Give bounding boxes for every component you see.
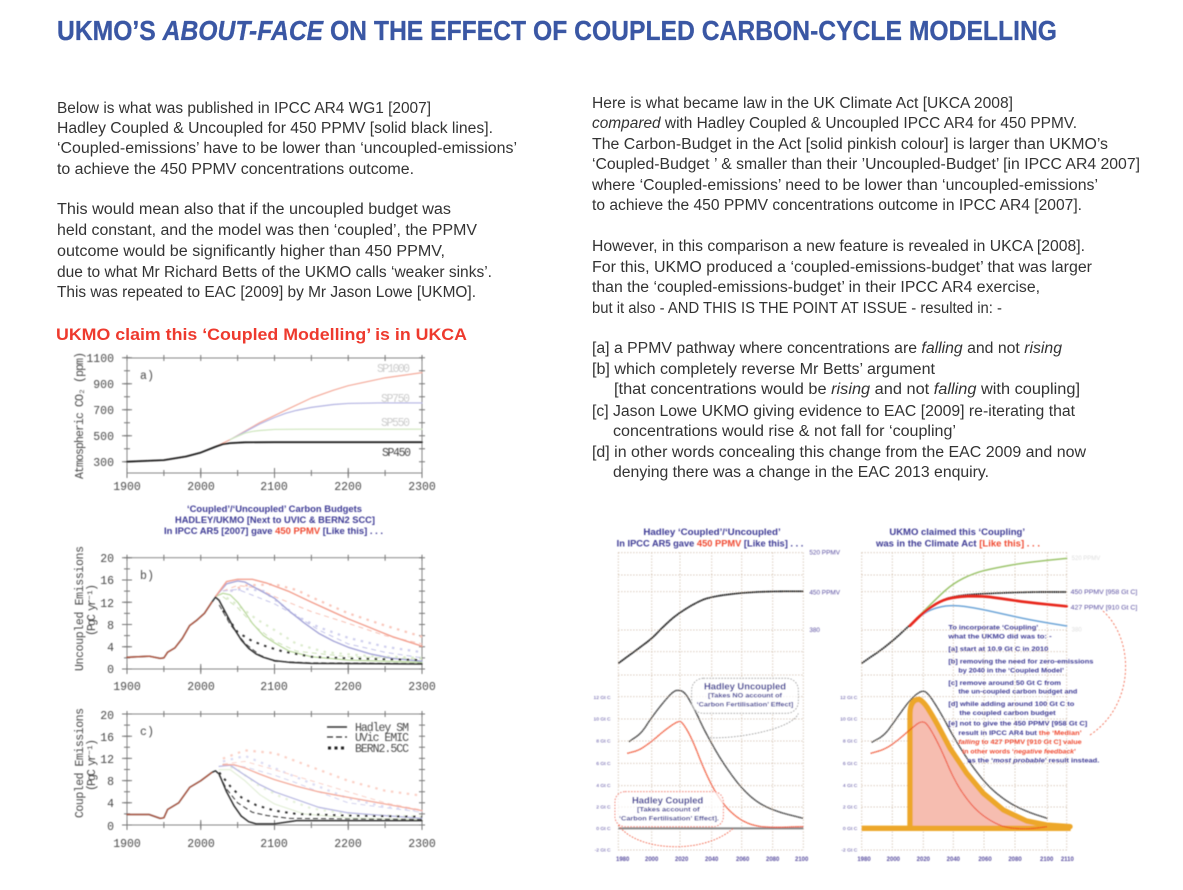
x tick labels e: [857, 857, 1074, 863]
concentration reference curve e: [862, 592, 1067, 663]
scenario label SP750: SP750: [381, 393, 410, 406]
text block: left intro: ‘Coupled-emissions’ have to be lower than ‘uncoupled-emissions’: [57, 140, 517, 157]
x tick labels e: 2040: [947, 857, 961, 863]
coupled emissions curve d: [627, 721, 803, 827]
x tick labels e: 2000: [887, 857, 901, 863]
annotation: how UKMO incorporated coupling: what the UKMO did was to: -: [947, 633, 1052, 640]
annotation: how UKMO incorporated coupling: result in IPCC AR4 but the ‘Median’: [958, 730, 1082, 737]
text block: right lettered list: [a] a PPMV pathway where concentrations are falling and not rising: [592, 340, 1062, 357]
blue lower scenario curve: [910, 606, 1067, 626]
PPMV labels d: [809, 550, 841, 634]
x tick labels b: 2000: [187, 681, 215, 694]
y tick labels d: 0 Gt C: [596, 826, 611, 832]
text block: left weaker sinks argument: outcome would be significantly higher than 450 PPMV,: [57, 243, 445, 260]
y tick labels d: 8 Gt C: [596, 739, 611, 745]
annotation: how UKMO incorporated coupling: the un-coupled carbon budget and: [958, 689, 1077, 696]
concentration curve d: [618, 591, 803, 663]
x tick labels a: 2300: [408, 481, 436, 494]
y tick labels a: 300: [93, 457, 114, 470]
y tick labels d: 2 Gt C: [596, 805, 611, 811]
x tick labels e: 2060: [978, 857, 992, 863]
caption: carbon budgets between charts: ‘Coupled’/‘Uncoupled’ Carbon Budgets: [187, 504, 362, 514]
uncoupled emissions curve d: [629, 690, 803, 818]
text block: left intro: [57, 100, 517, 178]
annotation: how UKMO incorporated coupling: [947, 624, 1099, 764]
text block: right UK Climate Act: to achieve the 450 PPMV concentrations outcome in IPCC AR4 [2007].: [592, 197, 1082, 214]
x tick labels d: 2040: [705, 857, 719, 863]
x tick labels b: [113, 681, 436, 694]
text block: left weaker sinks argument: [57, 201, 492, 301]
zero line d: [618, 825, 803, 831]
y tick labels e: [840, 695, 858, 854]
x tick labels c: 2200: [334, 838, 362, 851]
x tick labels c: 2100: [260, 838, 288, 851]
red heading: UKMO claim: UKMO claim this ‘Coupled Modelling’ is in UKCA: [56, 325, 467, 344]
text block: right new feature: However, in this comparison a new feature is revealed in UKCA [2008].: [592, 238, 1085, 255]
annotation: how UKMO incorporated coupling: in other words ‘negative feedback’: [962, 748, 1076, 755]
text block: left intro: to achieve the 450 PPMV concentrations outcome.: [57, 161, 414, 178]
x tick labels b: 2200: [334, 681, 362, 694]
annotation: how UKMO incorporated coupling: by 2040 in the ‘Coupled Model’: [958, 667, 1064, 674]
text block: right lettered list: concentrations would rise & not fall for ‘coupling’: [613, 423, 956, 440]
chart a: atmospheric CO2: [74, 352, 436, 494]
PPMV labels e: 380: [1072, 628, 1082, 634]
red median curve: [910, 596, 1067, 626]
panel letter a: a): [140, 370, 154, 383]
callout: Hadley Uncoupled: [Takes NO account of: [708, 693, 783, 700]
chart e: UKMO claimed coupling in Climate Act: [840, 527, 1138, 863]
y tick labels a: 1100: [86, 353, 114, 366]
PPMV labels d: 380: [809, 627, 820, 634]
legend c: BERN2.5CC: [355, 743, 409, 756]
legend c: Hadley SM: [355, 722, 409, 735]
x tick labels d: 2000: [645, 857, 659, 863]
text block: left weaker sinks argument: held constant, and the model was then ‘coupled’, the PPMV: [57, 222, 478, 239]
x tick labels e: 2110: [1061, 857, 1074, 863]
text block: right UK Climate Act: compared with Hadley Coupled & Uncoupled IPCC AR4 for 450 PPMV.: [592, 115, 1077, 132]
chart d heading: Hadley ‘Coupled’/‘Uncoupled’: [643, 527, 781, 537]
text block: right UK Climate Act: [591, 95, 1140, 214]
green upper scenario curve: [910, 558, 1067, 625]
y tick labels c: 8: [107, 776, 114, 789]
chart e heading: was in the Climate Act [Like this] . . .: [875, 539, 1040, 549]
chart d heading: In IPCC AR5 gave 450 PPMV [Like this] . . .: [617, 539, 803, 549]
y tick labels c: 0: [107, 821, 114, 834]
PPMV labels e: 520 PPMV: [1072, 556, 1100, 562]
x tick labels e: 1980: [857, 857, 871, 863]
y tick labels d: -2 Gt C: [595, 848, 611, 854]
annotation: how UKMO incorporated coupling: falling to 427 PPMV [910 Gt C] value: [958, 739, 1082, 746]
pink carbon budget area: [910, 699, 1070, 828]
scenario label SP1000: SP1000: [377, 363, 410, 376]
caption: carbon budgets between charts: [164, 504, 383, 536]
x tick labels d: 2100: [795, 857, 809, 863]
y tick labels d: 12 Gt C: [593, 695, 611, 701]
y tick labels e: 6 Gt C: [843, 761, 858, 767]
x tick labels a: 2100: [260, 481, 288, 494]
chart e heading: UKMO claimed this ‘Coupling’: [889, 527, 1025, 537]
y tick labels a: 500: [93, 431, 114, 444]
text block: left intro: Hadley Coupled & Uncoupled for 450 PPMV [solid black lines].: [57, 120, 493, 137]
x tick labels c: 2000: [187, 838, 215, 851]
callout: Hadley Uncoupled: Hadley Uncoupled: [704, 681, 786, 691]
y axis title c: Coupled Emissions: [74, 708, 87, 818]
callout: Hadley Coupled: ‘Carbon Fertilisation’ Effect].: [619, 815, 719, 822]
y tick labels d: 10 Gt C: [593, 717, 611, 723]
x tick labels d: 2060: [736, 857, 750, 863]
y tick labels b: 16: [100, 575, 114, 588]
callout: Hadley Uncoupled: ‘Carbon Fertilisation’ Effect]: [697, 701, 793, 708]
y tick labels e: 2 Gt C: [843, 805, 858, 811]
y tick labels b: [100, 553, 114, 677]
y tick labels e: 10 Gt C: [840, 717, 858, 723]
annotation: how UKMO incorporated coupling: [b] removing the need for zero-emissions: [948, 659, 1094, 666]
text block: left weaker sinks argument: This would mean also that if the uncoupled budget was: [57, 201, 451, 218]
text block: right UK Climate Act: Here is what became law in the UK Climate Act [UKCA 2008]: [592, 95, 1013, 112]
callout: Hadley Coupled: [615, 792, 733, 847]
chart d: Hadley coupled and uncoupled: [593, 527, 841, 863]
caption: carbon budgets between charts: In IPCC AR5 [2007] gave 450 PPMV [Like this] . . .: [164, 526, 383, 536]
text block: right lettered list: denying there was a change in the EAC 2013 enquiry.: [613, 464, 989, 481]
y axis title a: Atmospheric CO₂ (ppm): [74, 352, 87, 479]
x tick labels d: [616, 857, 809, 863]
text block: right lettered list: [that concentrations would be rising and not falling with coupling]: [614, 381, 1080, 398]
text block: right lettered list: [d] in other words concealing this change from the EAC 2009 and now: [592, 444, 1087, 461]
annotation: how UKMO incorporated coupling: [c] remove around 50 Gt C from: [948, 680, 1061, 687]
y tick labels b: 12: [100, 598, 114, 611]
text block: right UK Climate Act: The Carbon-Budget in the Act [solid pinkish colour] is larger than UKMO’s: [592, 136, 1108, 153]
x tick labels b: 1900: [113, 681, 141, 694]
text block: left weaker sinks argument: due to what Mr Richard Betts of the UKMO calls ‘weaker sinks’.: [57, 264, 492, 281]
x tick labels e: 2080: [1008, 857, 1022, 863]
x tick labels a: 1900: [113, 481, 141, 494]
legend c: UVic EMIC: [355, 732, 409, 745]
x tick labels a: 2000: [187, 481, 215, 494]
y tick labels c: 12: [100, 754, 114, 767]
y tick labels b: 0: [107, 664, 114, 677]
chart e heading: [875, 527, 1040, 549]
x tick labels a: 2200: [334, 481, 362, 494]
scenario label SP450: SP450: [382, 447, 411, 460]
annotation: how UKMO incorporated coupling: [a] start at 10.9 Gt C in 2010: [948, 646, 1049, 653]
y tick labels b: 8: [107, 620, 114, 633]
arrow: red leader from 427 PPMV to annotation: [1090, 611, 1126, 735]
legend c: [327, 722, 409, 756]
y tick labels a: 900: [93, 379, 114, 392]
orange budget outline: [862, 699, 1071, 828]
x tick labels b: 2300: [408, 681, 436, 694]
y tick labels e: 12 Gt C: [840, 695, 858, 701]
y tick labels e: 8 Gt C: [843, 739, 858, 745]
text block: right new feature: [592, 238, 1092, 317]
annotation: how UKMO incorporated coupling: [d] while adding around 100 Gt C to: [948, 701, 1074, 708]
callout: Hadley Coupled: [Takes account of: [637, 806, 701, 813]
y tick labels b: 20: [100, 553, 114, 566]
text block: right UK Climate Act: where ‘Coupled-emissions’ need to be lower than ‘uncoupled-emissions’: [591, 177, 1098, 194]
x tick labels a: [113, 481, 436, 494]
uncoupled emissions curve e: [872, 691, 1047, 818]
PPMV labels d: 520 PPMV: [809, 550, 841, 557]
PPMV labels e: 427 PPMV [910 Gt C]: [1071, 606, 1138, 612]
text block: right lettered list: [b] which completely reverse Mr Betts’ argument: [592, 361, 936, 378]
chart d heading: [617, 527, 803, 549]
x tick labels c: 2300: [408, 838, 436, 851]
x tick labels e: 2020: [917, 857, 931, 863]
text block: right UK Climate Act: ‘Coupled-Budget ’ & smaller than their ’Uncoupled-Budget’ [in IPCC AR4 2007]: [592, 156, 1140, 173]
PPMV labels d: 450 PPMV: [809, 589, 841, 596]
coupled emissions curve e: [871, 722, 1047, 829]
y tick labels e: 0 Gt C: [843, 826, 858, 832]
y tick labels c: 4: [107, 798, 114, 811]
y axis units b: (PgC yr⁻¹): [86, 584, 99, 636]
callout: Hadley Uncoupled: [692, 678, 798, 738]
y tick labels e: 4 Gt C: [843, 783, 858, 789]
x tick labels d: 1980: [616, 857, 630, 863]
y tick labels d: 6 Gt C: [596, 761, 611, 767]
annotation: how UKMO incorporated coupling: as the ‘most probable ’ result instead.: [967, 757, 1099, 764]
x tick labels e: 2100: [1040, 857, 1054, 863]
scenario label SP550: SP550: [381, 417, 410, 430]
y tick labels c: 20: [100, 710, 114, 723]
text block: right new feature: than the ‘coupled-emissions-budget’ in their IPCC AR4 exercise,: [592, 279, 1040, 296]
y tick labels c: [100, 710, 114, 834]
y axis title b: Uncoupled Emissions: [74, 546, 87, 671]
y tick labels b: 4: [107, 642, 114, 655]
y tick labels d: 4 Gt C: [596, 783, 611, 789]
x tick labels c: 1900: [113, 838, 141, 851]
PPMV labels e: [1071, 556, 1138, 634]
panel letter b: b): [140, 570, 154, 583]
y tick labels a: [86, 353, 114, 470]
text block: right new feature: For this, UKMO produced a ‘coupled-emissions-budget’ that was larger: [592, 259, 1092, 276]
text block: right lettered list: [c] Jason Lowe UKMO giving evidence to EAC [2009] re-iterating that: [592, 403, 1076, 420]
y tick labels d: [593, 695, 611, 854]
chart b: uncoupled emissions: [74, 546, 436, 694]
chart c: coupled emissions: [74, 708, 436, 851]
y axis units c: (PgC yr⁻¹): [86, 739, 99, 791]
x tick labels d: 2020: [675, 857, 689, 863]
callout: Hadley Coupled: Hadley Coupled: [632, 795, 704, 805]
x tick labels b: 2100: [260, 681, 288, 694]
x tick labels d: 2080: [766, 857, 780, 863]
text block: right lettered list: [592, 340, 1087, 481]
annotation: how UKMO incorporated coupling: the coupled carbon budget: [959, 710, 1057, 717]
text block: left weaker sinks argument: This was repeated to EAC [2009] by Mr Jason Lowe [UKMO].: [57, 284, 476, 301]
x tick labels c: [113, 838, 436, 851]
y tick labels e: -2 Gt C: [841, 848, 858, 854]
y tick labels c: 16: [100, 732, 114, 745]
annotation: how UKMO incorporated coupling: To incorporate ‘Coupling’: [948, 624, 1038, 631]
caption: carbon budgets between charts: HADLEY/UKMO [Next to UVIC & BERN2 SCC]: [175, 515, 375, 525]
text block: right new feature: but it also - AND THIS IS THE POINT AT ISSUE - resulted in: -: [592, 300, 1002, 317]
title: UKMO’S ABOUT-FACE ON THE EFFECT OF COUPLED CARBON-CYCLE MODELLING: [57, 15, 1057, 46]
PPMV labels e: 450 PPMV [958 Gt C]: [1071, 590, 1138, 596]
annotation: how UKMO incorporated coupling: [e] not to give the 450 PPMV [958 Gt C]: [948, 721, 1087, 728]
text block: left intro: Below is what was published in IPCC AR4 WG1 [2007]: [57, 100, 431, 117]
y tick labels a: 700: [93, 405, 114, 418]
panel letter c: c): [140, 726, 154, 739]
